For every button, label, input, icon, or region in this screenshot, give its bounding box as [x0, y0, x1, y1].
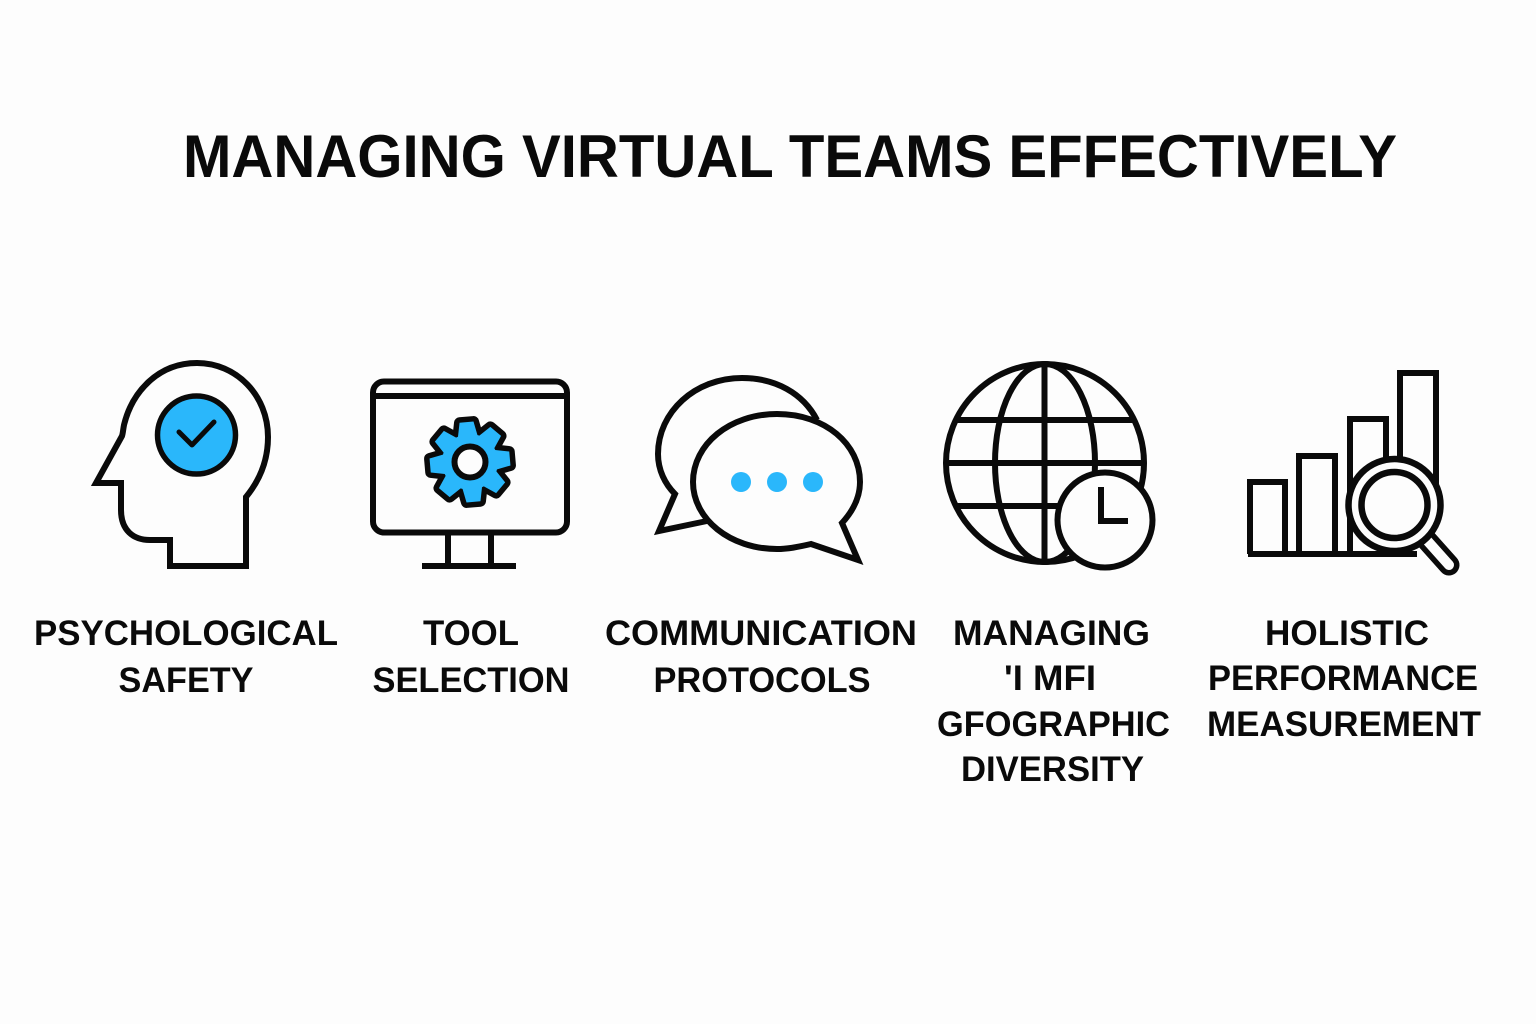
- icon: head with check: [96, 363, 268, 566]
- label: tool selection: TOOL: [423, 614, 519, 653]
- label: holistic performance measurement: PERFORMANCE: [1208, 659, 1478, 698]
- icon: bar chart with magnifier: [1248, 373, 1449, 565]
- icon: monitor with gear: [373, 382, 567, 566]
- title: MANAGING VIRTUAL TEAMS EFFECTIVELY: [183, 123, 1397, 190]
- label: managing geographic diversity: [937, 614, 1170, 789]
- label: psychological safety: SAFETY: [118, 661, 254, 700]
- label: managing geographic diversity: 'I MFI: [1004, 659, 1096, 698]
- label: holistic performance measurement: HOLISTIC: [1265, 614, 1429, 653]
- label: managing geographic diversity: MANAGING: [953, 614, 1150, 653]
- label: tool selection: SELECTION: [372, 661, 570, 700]
- label: managing geographic diversity: GFOGRAPHIC: [937, 705, 1170, 744]
- label: tool selection: [372, 614, 570, 700]
- label: communication protocols: COMMUNICATION: [605, 614, 917, 653]
- icon: globe with clock: [946, 364, 1152, 568]
- label: communication protocols: PROTOCOLS: [654, 661, 870, 700]
- label: communication protocols: [605, 614, 917, 700]
- label: holistic performance measurement: MEASUREMENT: [1207, 705, 1481, 744]
- label: managing geographic diversity: DIVERSITY: [961, 750, 1144, 789]
- label: holistic performance measurement: [1207, 614, 1481, 744]
- label: psychological safety: [34, 614, 338, 700]
- icon: chat bubbles: [658, 378, 860, 560]
- label: psychological safety: PSYCHOLOGICAL: [34, 614, 338, 653]
